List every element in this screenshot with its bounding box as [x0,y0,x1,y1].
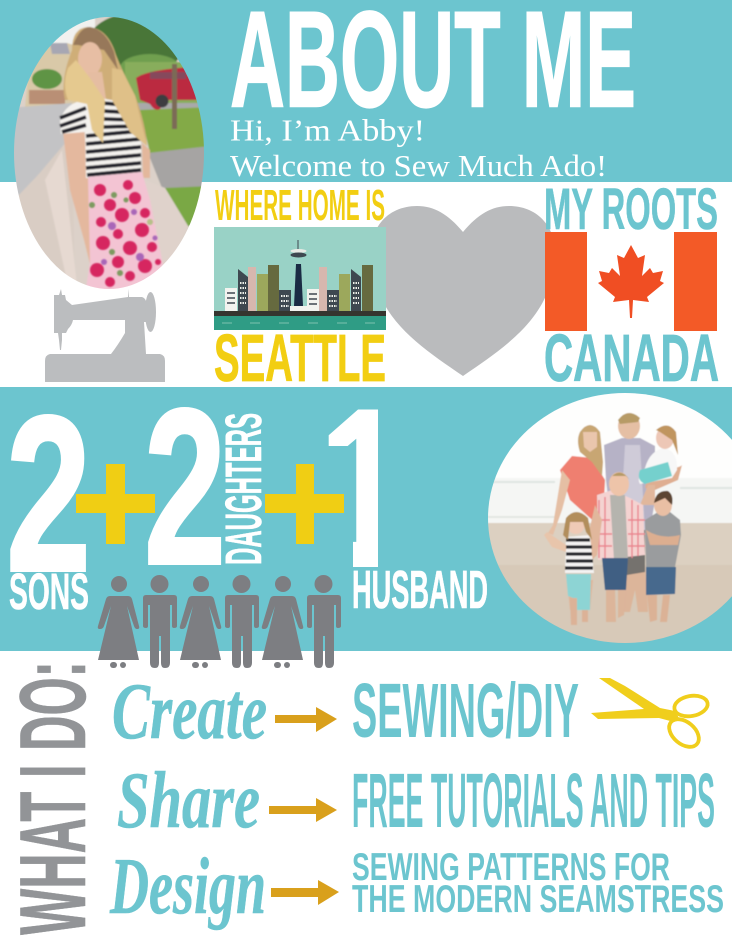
arrow: share [269,798,337,822]
arrow: create [275,707,337,732]
script: create: Create [112,668,267,756]
number: 1 husband: 1 [318,361,411,614]
icon: seattle skyline [214,227,386,330]
text: WHERE HOME IS [215,181,385,230]
icon: scissors [591,678,709,752]
photo: family on the beach [485,390,732,650]
heading: seattle: SEATTLE [214,321,386,396]
plus sign two [265,464,344,544]
text: sewing patterns [352,846,724,921]
figure: man 3 [307,575,341,668]
figure: woman 1 [98,576,139,668]
greeting text: Welcome to Sew Much Ado! [230,148,607,183]
script: share: Share [117,757,260,845]
script: design: Design [109,843,266,931]
panel: family band [0,387,732,651]
greeting text [230,112,607,183]
text: DAUGHTERS [215,413,272,565]
figure: man 1 [143,575,177,668]
heading: what i do: WHAT I DO: [0,661,105,935]
figure: woman 2 [180,576,221,668]
number: 2 sons: 2 [6,370,91,618]
label: sons: SONS [9,563,89,620]
photo: woman in oval [10,10,210,295]
number: 2 daughters: 2 [144,364,226,612]
figure: man 2 [225,575,259,668]
figure: woman 3 [262,576,303,668]
arrow: design [271,880,339,905]
panel: about me band [0,0,732,182]
icon: heart [371,206,555,376]
label: husband: HUSBAND [352,560,488,620]
icon: canadian flag [545,232,718,331]
plus sign one [76,464,155,544]
greeting text: Hi, I’m Abby! [230,112,425,148]
icon: family figures [98,575,341,668]
icon: sewing machine [45,289,165,382]
